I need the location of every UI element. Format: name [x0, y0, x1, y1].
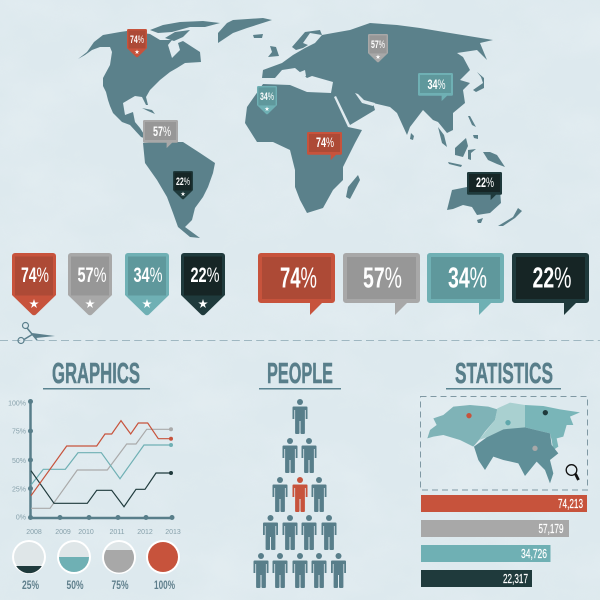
heading: people — [259, 358, 341, 390]
people pyramid — [254, 399, 346, 588]
icon: magnifier — [566, 465, 578, 480]
map callout red 74%: 74% — [316, 134, 334, 150]
map callout teal 34% — [418, 73, 453, 101]
large pin teal 34% — [125, 253, 169, 315]
gauge 100%: 100% — [154, 578, 175, 592]
Africa, Europe and Asia — [245, 23, 493, 213]
large pin red 74%: 74% — [21, 264, 49, 287]
y axis labels: 75% — [12, 428, 26, 436]
series teal — [31, 443, 173, 485]
bar 74,213 — [421, 495, 587, 512]
Tasmania — [477, 218, 483, 223]
gauge 75%: 75% — [112, 578, 129, 592]
map pin dark 22%: 22% — [176, 176, 190, 188]
map callout red 74% — [307, 132, 342, 160]
large callout teal 34% — [427, 253, 504, 315]
bar 22,317: 22,317 — [503, 571, 528, 586]
large callout red 74%: 74% — [280, 262, 317, 294]
large pin gray 57%: 57% — [78, 264, 106, 287]
map callout dark 22% — [467, 172, 502, 200]
Black Sea gap — [300, 70, 306, 78]
South America — [143, 142, 215, 238]
x axis labels: 2013 — [165, 529, 181, 536]
world map — [78, 18, 522, 238]
map callout gray 57%: 57% — [153, 123, 171, 139]
series gray — [31, 427, 173, 508]
chart axes — [28, 399, 174, 520]
bar 34,726 — [421, 545, 550, 562]
Cuba — [142, 108, 155, 114]
icon: scissors — [18, 322, 55, 344]
highlighted person — [292, 477, 308, 512]
Borneo — [455, 138, 468, 157]
Persian Gulf gap — [355, 93, 375, 106]
heading: statistics — [446, 358, 561, 390]
large callout gray 57%: 57% — [363, 262, 402, 294]
large callout red 74% — [258, 253, 335, 315]
large pin dark 22%: 22% — [190, 264, 220, 287]
map callout teal 34%: 34% — [428, 76, 446, 92]
Japan — [473, 72, 484, 92]
y axis labels: 100% — [8, 400, 26, 408]
series red — [31, 421, 173, 496]
Madagascar — [346, 175, 360, 199]
gauge 75% — [102, 540, 136, 592]
large callout dark 22% — [512, 253, 589, 315]
North and Central America — [78, 31, 201, 139]
large callout gray 57% — [343, 253, 420, 315]
map pin red 74%: 74% — [130, 34, 144, 46]
bar 22,317 — [421, 570, 532, 587]
map pin teal 34% — [257, 86, 277, 114]
gauge 100% — [146, 540, 180, 592]
heading: people: PEOPLE — [267, 358, 333, 390]
y axis labels: 25% — [12, 486, 26, 494]
y axis labels — [8, 400, 26, 522]
Britain — [268, 46, 279, 57]
map callout dark 22%: 22% — [476, 174, 494, 190]
x axis labels: 2012 — [137, 529, 153, 536]
x axis labels: 2010 — [78, 529, 94, 536]
Australia — [447, 180, 501, 215]
Sulawesi — [468, 149, 476, 160]
large pin teal 34%: 34% — [134, 264, 162, 287]
bar 74,213: 74,213 — [558, 496, 583, 511]
Scandinavia — [292, 30, 322, 50]
gauge 25%: 25% — [22, 578, 39, 592]
map callout gray 57% — [143, 120, 178, 148]
Arctic islands — [150, 21, 220, 33]
Greenland — [218, 18, 272, 43]
gauge 25% — [12, 540, 46, 592]
map pin gray 57% — [368, 34, 388, 62]
heading: graphics — [43, 358, 150, 390]
map pin teal 34%: 34% — [260, 91, 274, 103]
bar 57,179: 57,179 — [538, 521, 564, 536]
zoomed region map — [420, 396, 588, 490]
Java — [448, 162, 462, 167]
Philippines — [468, 116, 478, 139]
y axis labels: 0% — [16, 514, 26, 522]
Baffin Island — [165, 30, 190, 41]
x axis labels: 2008 — [26, 529, 42, 536]
Sumatra — [438, 127, 447, 147]
gauge 50% — [57, 540, 91, 592]
bar 57,179 — [421, 520, 569, 537]
New Guinea — [483, 152, 505, 167]
map pin red 74% — [127, 29, 147, 57]
large pin dark 22% — [181, 253, 225, 315]
bar 34,726: 34,726 — [521, 546, 547, 561]
line chart — [8, 399, 181, 536]
inset map regions — [427, 403, 580, 483]
New Zealand — [498, 208, 522, 226]
x axis labels: 2009 — [55, 529, 71, 536]
large callout dark 22%: 22% — [532, 262, 572, 294]
Iceland — [253, 34, 263, 38]
gauge 50%: 50% — [66, 578, 84, 592]
map pin dark 22% — [173, 171, 193, 199]
Sri Lanka — [410, 133, 414, 140]
large pin gray 57% — [68, 253, 112, 315]
large pin red 74% — [12, 253, 56, 315]
large callout teal 34%: 34% — [448, 262, 487, 294]
x axis labels — [26, 529, 181, 536]
map pin gray 57%: 57% — [371, 39, 385, 51]
y axis labels: 50% — [12, 458, 26, 465]
heading: graphics: GRAPHICS — [52, 358, 140, 390]
x axis labels: 2011 — [109, 529, 125, 536]
series dark — [31, 471, 173, 507]
